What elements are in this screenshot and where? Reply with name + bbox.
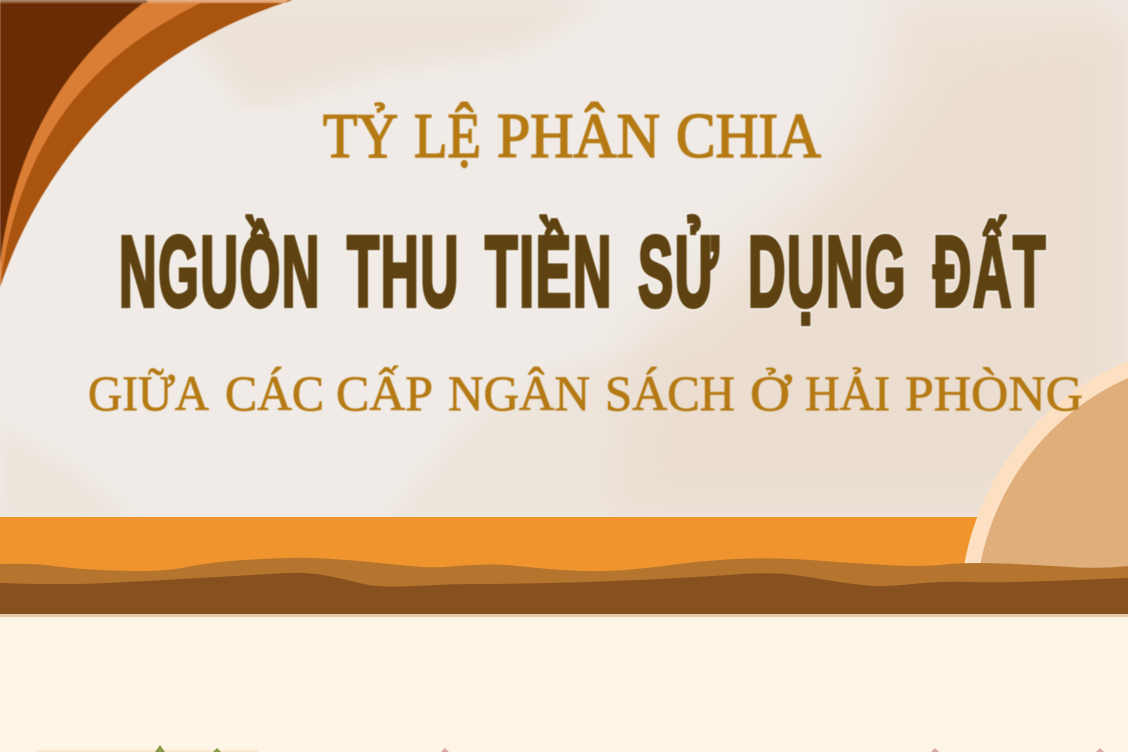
subtitle line 2 [88, 365, 1083, 421]
subtitle line 1 [323, 101, 821, 171]
main title: TIỀN [485, 216, 613, 328]
subtitle line 2: CÁC [225, 365, 324, 421]
wavy hills: lighter layer [0, 558, 1128, 600]
header marble background [0, 0, 1128, 520]
lower edge shadow [0, 614, 1128, 617]
sun decoration circle [963, 361, 1128, 572]
subtitle line 2: PHÒNG [905, 365, 1083, 421]
subtitle line 1: LỆ [414, 101, 481, 171]
main title: TIỀN [485, 216, 613, 328]
main title: THU [347, 216, 460, 328]
subtitle line 2: NGÂN [448, 365, 590, 421]
subtitle line 1: PHÂN [497, 101, 660, 171]
main title: NGUỒN [119, 216, 321, 328]
subtitle line 1: CHIA [676, 101, 821, 171]
subtitle line 2: CẤP [336, 365, 433, 421]
main title [119, 215, 1047, 328]
orange ribbon band [0, 517, 1128, 577]
main title: NGUỒN [119, 216, 321, 328]
subtitle line 2: GIỮA [88, 365, 209, 421]
subtitle line 2: SÁCH [605, 365, 735, 421]
lower cream panel [0, 617, 1128, 752]
main title: DỤNG [748, 216, 907, 328]
main title: DỤNG [748, 216, 907, 328]
subtitle line 1: TỶ [323, 101, 398, 171]
main title: THU [347, 216, 460, 328]
main title: SỬ [638, 216, 720, 328]
wavy hills: darker layer [0, 573, 1128, 614]
cropped bottom illustration tips [36, 745, 1104, 752]
corner decoration: brown arcs [0, 0, 293, 287]
main title: SỬ [638, 216, 720, 328]
subtitle line 2: Ở [750, 365, 792, 421]
subtitle line 2: HẢI [805, 365, 890, 421]
